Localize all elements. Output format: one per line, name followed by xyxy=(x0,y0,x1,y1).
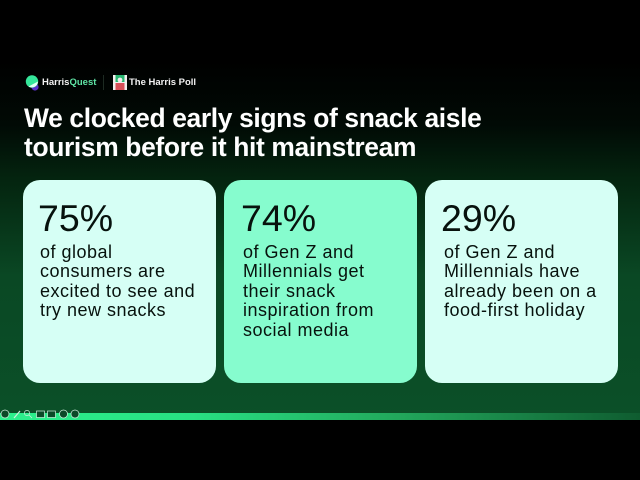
text: 75% description xyxy=(40,242,195,320)
presenter toolbar icons xyxy=(0,410,80,418)
text: 29% description: Millennials have xyxy=(444,261,580,281)
text: 75% description: of global xyxy=(40,242,113,262)
text: 75% description: consumers are xyxy=(40,261,166,281)
panel: 75% stat xyxy=(23,180,216,383)
logo divider xyxy=(103,75,104,90)
logo: HarrisQuest xyxy=(26,75,96,91)
title: tourism before it hit mainstream xyxy=(24,132,416,162)
number: 75%: 75% xyxy=(38,197,113,239)
text: 74% description: their snack xyxy=(243,281,336,301)
text: 75% description: try new snacks xyxy=(40,300,166,320)
text: 75% description: excited to see and xyxy=(40,281,195,301)
text: 29% description: food-first holiday xyxy=(444,300,585,320)
icon: HarrisQuest mark xyxy=(26,75,39,91)
text: 74% description: of Gen Z and xyxy=(243,242,354,262)
wordmark: The Harris Poll: The Harris Poll xyxy=(129,77,196,88)
slide background xyxy=(0,60,640,420)
wordmark: HarrisQuest: HarrisQuest xyxy=(42,77,96,88)
panel: 74% stat xyxy=(224,180,417,383)
number: 29%: 29% xyxy=(441,197,516,239)
logo: The Harris Poll xyxy=(113,75,196,90)
text: 29% description xyxy=(444,242,597,320)
text: 29% description: of Gen Z and xyxy=(444,242,555,262)
title: We clocked early signs of snack aisle xyxy=(24,103,481,133)
text: 74% description: Millennials get xyxy=(243,261,365,281)
text: 74% description xyxy=(243,242,374,340)
number: 74%: 74% xyxy=(241,197,316,239)
text: 74% description: social media xyxy=(243,320,349,340)
bottom accent bar xyxy=(0,413,640,420)
text: 74% description: inspiration from xyxy=(243,300,374,320)
panel: 29% stat xyxy=(425,180,618,383)
title xyxy=(24,103,481,162)
icon: The Harris Poll mark xyxy=(113,75,127,90)
text: 29% description: already been on a xyxy=(444,281,597,301)
